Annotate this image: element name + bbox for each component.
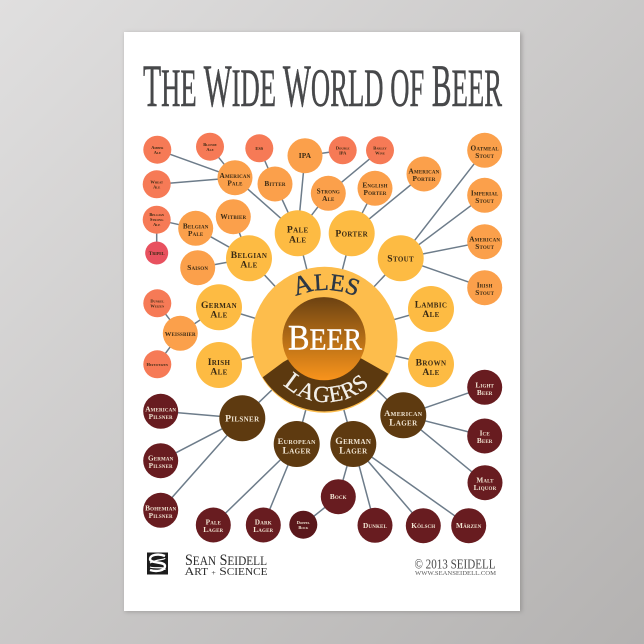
- belgian pale: [178, 211, 213, 246]
- malt liquor: Liquor: [474, 483, 497, 492]
- american lager: [380, 392, 426, 438]
- ales ring: [252, 267, 398, 413]
- pilsner: Pilsner: [225, 414, 260, 424]
- american stout: Stout: [475, 242, 495, 251]
- double ipa: IPA: [339, 150, 347, 156]
- double ipa: [329, 136, 357, 164]
- website: WWW.SEANSEIDELL.COM: [415, 570, 496, 577]
- bitter: Bitter: [264, 179, 286, 188]
- dunkel: Dunkel: [363, 521, 387, 530]
- saison: [180, 250, 215, 285]
- strong ale: Ale: [322, 194, 335, 203]
- malt liquor: [468, 465, 502, 500]
- poster sheet: [124, 32, 520, 611]
- barley wine: [366, 136, 394, 164]
- german lager: German: [335, 436, 371, 447]
- pale lager: [196, 508, 231, 542]
- double ipa: Double: [336, 146, 350, 150]
- ale tier 2: [163, 133, 502, 351]
- porter: Porter: [335, 228, 369, 240]
- saison: Saison: [187, 263, 208, 272]
- oatmeal stout: Oatmeal: [471, 144, 499, 152]
- witbier: [216, 199, 251, 234]
- pilsner: [219, 395, 265, 441]
- light beer: [467, 370, 502, 405]
- american lager: Lager: [389, 418, 418, 428]
- european lager: [274, 421, 320, 467]
- dunkel weizen: [143, 289, 171, 317]
- dunkel weizen: Weizen: [150, 304, 165, 308]
- blonde ale: [196, 133, 224, 161]
- hub: beer: [252, 266, 398, 413]
- dark lager: Lager: [253, 525, 274, 534]
- bohemian pilsner: Pilsner: [149, 511, 173, 520]
- wheat ale: [143, 170, 171, 198]
- beer label: BEER: [288, 318, 362, 358]
- belgian strong ale: Ale: [153, 222, 160, 227]
- lagers wedge: [263, 339, 388, 411]
- american porter: American: [409, 166, 440, 176]
- weissbier: Weissbier: [165, 331, 196, 338]
- lambic ale: [408, 286, 454, 332]
- german ale: German: [201, 300, 237, 311]
- pale ale: Pale: [287, 224, 309, 236]
- belgian ale: Belgian: [231, 250, 267, 261]
- strong ale: Strong: [317, 186, 340, 196]
- weissbier: [163, 316, 198, 351]
- german pilsner: [143, 443, 178, 478]
- lager tier 1: [219, 392, 426, 467]
- ice beer: Ice: [480, 428, 490, 438]
- stout: Stout: [387, 254, 414, 264]
- dunkel: [358, 508, 392, 543]
- american pale: Pale: [227, 178, 243, 187]
- imperial stout: Stout: [475, 196, 495, 205]
- pale ale: Ale: [289, 234, 306, 245]
- german pilsner: German: [148, 454, 174, 462]
- american pale: [218, 160, 252, 195]
- hefeweizen: Hefeweizen: [147, 362, 169, 367]
- signature: art + science: ART + SCIENCE: [184, 564, 268, 578]
- ess: ESS: [255, 146, 264, 151]
- wheat ale: Ale: [153, 184, 160, 190]
- bohemian pilsner: Bohemian: [145, 504, 176, 512]
- imperial stout: [467, 178, 502, 213]
- bitter: [258, 166, 292, 202]
- copyright: © 2013 SEIDELL: [414, 558, 496, 572]
- ess: [245, 134, 273, 162]
- belgian pale: Pale: [188, 229, 204, 238]
- kolsch: [406, 508, 441, 543]
- lambic ale: Lambic: [415, 300, 447, 310]
- blonde ale: Ale: [206, 147, 214, 152]
- beer core: [282, 297, 366, 380]
- poster shadow: [125, 33, 522, 612]
- ipa: [288, 138, 322, 173]
- ale tier 3: [143, 133, 394, 378]
- bohemian pilsner: [143, 493, 178, 528]
- german pilsner: Pilsner: [149, 461, 173, 470]
- german lager: Lager: [339, 446, 368, 456]
- ale tier 1: [196, 210, 454, 388]
- american pale: American: [220, 171, 251, 180]
- lagers label: LAGERS: [283, 371, 367, 402]
- oatmeal stout: [467, 133, 502, 168]
- ales label: ALES: [295, 274, 360, 296]
- english porter: English: [362, 180, 388, 190]
- american stout: [467, 224, 502, 259]
- strong ale: [311, 176, 346, 211]
- amber ale: Ale: [154, 150, 161, 155]
- bock: [321, 479, 356, 514]
- dark lager: Dark: [255, 518, 272, 526]
- english porter: [358, 171, 392, 206]
- stout: [378, 235, 424, 281]
- lager tier 2: [143, 370, 502, 543]
- english porter: Porter: [364, 188, 387, 197]
- american pilsner: [143, 394, 178, 429]
- belgian pale: Belgian: [183, 222, 209, 230]
- belgian ale: [226, 235, 272, 281]
- imperial stout: Imperial: [471, 188, 499, 198]
- marzen: Märzen: [456, 521, 482, 530]
- witbier: Witbier: [220, 212, 246, 221]
- belgian ale: Ale: [240, 260, 258, 270]
- malt liquor: Malt: [476, 476, 494, 484]
- german lager: [330, 421, 376, 467]
- irish ale: Ale: [210, 367, 228, 378]
- belgian strong ale: [143, 206, 171, 234]
- light beer: Beer: [477, 388, 493, 397]
- kolsch: Kölsch: [411, 521, 435, 530]
- european lager: European: [278, 436, 316, 446]
- american porter: [406, 156, 442, 192]
- marzen: [451, 508, 486, 543]
- blonde ale: Blonde: [203, 142, 217, 147]
- doppel bock: Bock: [298, 525, 309, 530]
- pale ale: [275, 210, 321, 256]
- irish ale: [196, 342, 242, 388]
- brown ale: [408, 341, 454, 387]
- doppel bock: [289, 511, 317, 539]
- irish stout: Stout: [475, 288, 495, 297]
- brown ale: Ale: [422, 367, 440, 378]
- amber ale: [143, 136, 171, 164]
- european lager: Lager: [283, 446, 311, 456]
- brown ale: Brown: [416, 358, 446, 368]
- barley wine: Wine: [375, 150, 385, 156]
- tripel: [145, 242, 168, 264]
- porter: [329, 210, 375, 256]
- ice beer: [467, 418, 502, 454]
- irish stout: Irish: [477, 280, 493, 290]
- connector lines: [157, 147, 485, 526]
- american lager: American: [384, 408, 423, 418]
- doppel bock: Doppel: [297, 520, 310, 525]
- american porter: Porter: [413, 174, 436, 183]
- belgian strong ale: Strong: [150, 217, 164, 222]
- hefeweizen: [143, 350, 171, 378]
- lambic ale: Ale: [422, 309, 440, 320]
- irish stout: [467, 270, 502, 305]
- dunkel weizen: Dunkel: [150, 298, 164, 304]
- irish ale: Irish: [208, 357, 231, 368]
- pale lager: Lager: [203, 525, 224, 534]
- ice beer: Beer: [477, 436, 493, 445]
- tripel: Tripel: [149, 251, 165, 257]
- pale lager: Pale: [206, 518, 221, 526]
- oatmeal stout: Stout: [475, 151, 495, 160]
- belgian strong ale: Belgian: [149, 212, 165, 217]
- dark lager: [246, 508, 281, 542]
- german ale: Ale: [210, 310, 228, 321]
- german ale: [196, 284, 242, 330]
- barley wine: Barley: [373, 146, 388, 150]
- american pilsner: American: [145, 404, 176, 414]
- amber ale: Amber: [151, 145, 164, 150]
- bock: Bock: [330, 492, 347, 501]
- signature: sean seidell: SEAN SEIDELL: [185, 552, 267, 569]
- logo mark: [147, 552, 168, 574]
- ipa: IPA: [299, 151, 312, 160]
- american pilsner: Pilsner: [149, 412, 173, 421]
- wheat ale: Wheat: [150, 180, 163, 184]
- title: THE WIDE WORLD OF BEER: [143, 53, 502, 119]
- light beer: Light: [475, 380, 495, 390]
- american stout: American: [469, 234, 500, 244]
